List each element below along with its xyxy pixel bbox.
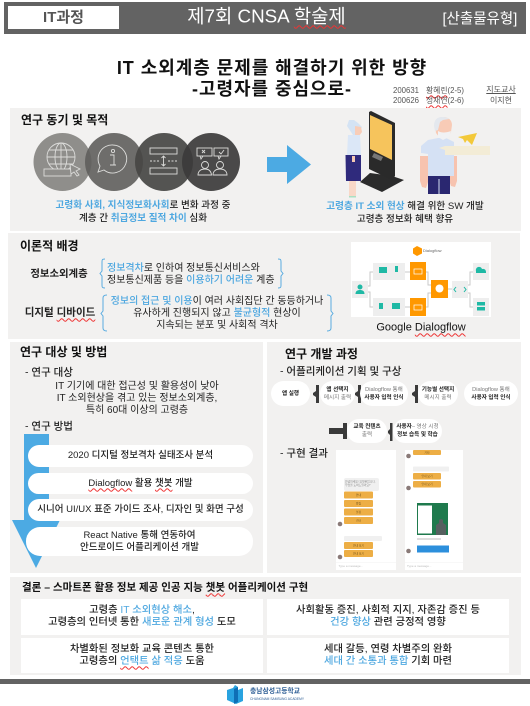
step 3: 시니어 UI/UX 표준 가이드 조사, 디자인 및 화면 구성 bbox=[37, 504, 244, 515]
target description: IT 기기에 대한 접근성 및 활용성이 낮아 bbox=[55, 381, 219, 392]
conclusion card 3: 고령층의 언택트 삶 적응 도움 bbox=[79, 656, 205, 666]
conclusion card 4 bbox=[267, 638, 509, 673]
advisor bbox=[486, 84, 516, 104]
flow step: education content: 출력 bbox=[362, 432, 372, 438]
heading: 연구 동기 및 목적 bbox=[21, 113, 108, 127]
flow step: app choices: 앱 선택지 bbox=[326, 386, 349, 392]
flow step: app choices: 메시지 출력 bbox=[324, 394, 351, 400]
definition: information-alienated class bbox=[107, 262, 275, 286]
header bar bbox=[4, 2, 526, 34]
icon row: four circles bbox=[34, 133, 240, 191]
chat screenshots: 기타 bbox=[424, 450, 430, 454]
braces bbox=[100, 258, 334, 332]
chat screenshots: 안내 보기 bbox=[421, 474, 433, 478]
chat screenshots: Type a message... bbox=[338, 564, 363, 568]
flow step: Dialogflow input again: Dialogflow 통해 bbox=[472, 386, 510, 392]
conclusion card 1: 고령층의 인터넷 통한 새로운 관계 형성 도모 bbox=[48, 617, 236, 628]
flow step: feature choices: 기능별 선택지 bbox=[422, 386, 454, 392]
school name: 충남삼성고등학교 bbox=[250, 688, 300, 695]
conclusion card 4: 세대 간 소통과 통합 기회 마련 bbox=[324, 656, 452, 666]
panel: research motivation and purpose bbox=[10, 108, 521, 231]
motivation text: 계층 간 취급정보 질적 차이 심화 bbox=[79, 212, 207, 224]
term: information-alienated class: 정보소외계층 bbox=[30, 269, 88, 280]
term: digital divide: 디지털 디바이드 bbox=[25, 307, 95, 319]
heading: 결론 – 스마트폰 활용 정보 제공 인공 지능 챗봇 어플리케이션 구현 bbox=[22, 582, 308, 594]
conclusion card 3: 차별화된 정보화 교육 콘텐츠 통한 bbox=[70, 644, 214, 654]
conclusion card 4: 세대 갈등, 연령 차별주의 완화 bbox=[324, 644, 452, 654]
event title: 제7회 CNSA 학술제 bbox=[187, 6, 346, 27]
subheading: result: - 구현 결과 bbox=[280, 448, 328, 460]
chat screenshots: 안내 보기 bbox=[353, 544, 364, 548]
chat screenshots bbox=[336, 450, 463, 570]
arrow: blue right bbox=[267, 145, 311, 184]
chat screenshots: 안녕하세요! 요챗봇입니다. bbox=[345, 480, 376, 484]
chat screenshots: 설정 bbox=[356, 510, 361, 514]
flow step: launch app: 앱 실행 bbox=[282, 390, 299, 396]
step 2 bbox=[28, 473, 253, 494]
panel: research target and method bbox=[10, 342, 263, 573]
flow connectors bbox=[313, 385, 418, 441]
flow step: Dialogflow input bbox=[360, 381, 408, 406]
chat screenshots: 안내 bbox=[356, 493, 361, 497]
chat screenshots: 안내 보기 bbox=[353, 552, 364, 556]
title: IT 소외계층 문제를 해결하기 위한 방향 bbox=[117, 58, 427, 78]
subheading: method: - 연구 방법 bbox=[25, 421, 73, 433]
illustration: elderly users and kiosk bbox=[346, 111, 490, 198]
conclusion card 2 bbox=[267, 599, 509, 635]
step 4: React Native 통해 연동하여 bbox=[83, 530, 196, 540]
subheading: planning: - 어플리케이션 기획 및 구상 bbox=[280, 366, 401, 378]
flow step: Dialogflow input again: 사용자 입력 인식 bbox=[471, 394, 511, 400]
subheading: target: - 연구 대상 bbox=[25, 367, 73, 379]
chat screenshots: 무엇을 도와드릴까요? bbox=[345, 483, 371, 487]
title bbox=[117, 58, 427, 99]
authors: 200626 bbox=[393, 96, 419, 104]
conclusion card 2: 사회활동 증진, 사회적 지지, 자존감 증진 등 bbox=[296, 605, 480, 616]
flow step: Dialogflow input: Dialogflow 통해 bbox=[365, 386, 403, 392]
flow step: education content: 교육 컨텐츠 bbox=[353, 424, 381, 430]
course label: IT과정 bbox=[43, 9, 84, 26]
flow step: user learning: 정보 습득 및 학습 bbox=[397, 432, 438, 438]
flow step: Dialogflow input again bbox=[464, 381, 518, 406]
conclusion card 1 bbox=[21, 599, 263, 635]
panel: conclusion bbox=[10, 577, 521, 675]
target description: IT 소외현상을 겪고 있는 정보소외계층, bbox=[57, 393, 217, 404]
motivation text bbox=[56, 200, 230, 224]
target description: 특히 60대 이상의 고령층 bbox=[86, 405, 188, 416]
definition: digital divide bbox=[111, 295, 323, 331]
diagram: Dialogflow architecture bbox=[351, 242, 491, 317]
flow step: app choices bbox=[320, 381, 355, 406]
motivation text: 고령화 사회, 지식정보화사회로 변화 과정 중 bbox=[56, 200, 230, 210]
chat screenshots: 알림 bbox=[356, 502, 361, 506]
flow step: user learning bbox=[393, 419, 442, 443]
solution text: 고령층 정보화 혜택 향유 bbox=[357, 214, 453, 224]
output type: [산출물유형] bbox=[442, 11, 517, 27]
conclusion card 1: 고령층 IT 소외현상 해소, bbox=[89, 605, 195, 616]
flow step: launch app bbox=[271, 381, 310, 406]
definition: information-alienated class: 정보통신제품 등을 이용하기 어려운 계층 bbox=[107, 275, 275, 286]
authors: 200631 bbox=[393, 86, 419, 94]
diagram: Dialogflow architecture: Dialogflow bbox=[423, 248, 442, 253]
heading: 이론적 배경 bbox=[20, 239, 79, 253]
solution text: 고령층 IT 소외 현상 해결 위한 SW 개발 bbox=[326, 200, 484, 212]
flow step: user learning: 사용자– 영상 시청 bbox=[396, 424, 439, 430]
panel: theoretical background bbox=[8, 233, 520, 339]
solution text bbox=[326, 200, 484, 224]
step 2: Dialogflow 활용 챗봇 개발 bbox=[88, 478, 193, 488]
authors bbox=[393, 86, 464, 108]
flow step: feature choices bbox=[418, 381, 458, 406]
arrow: process down bbox=[12, 434, 60, 568]
authors: 정재연(2-6) bbox=[426, 96, 464, 104]
advisor: 이지현 bbox=[490, 96, 512, 104]
step 4: 안드로이드 어플리케이션 개발 bbox=[80, 542, 199, 552]
conclusion card 3 bbox=[21, 638, 263, 673]
panel: development process bbox=[267, 342, 521, 573]
flow step: Dialogflow input: 사용자 입력 인식 bbox=[364, 394, 404, 400]
definition: digital divide: 지속되는 분포 및 사회적 격차 bbox=[156, 320, 278, 331]
heading: 연구 개발 과정 bbox=[285, 347, 358, 361]
authors: 황혜린(2-5) bbox=[426, 86, 464, 94]
step 4 bbox=[26, 527, 253, 556]
flow step: feature choices: 메시지 출력 bbox=[424, 394, 452, 400]
chat screenshots: Type a message... bbox=[407, 564, 432, 568]
school name english: CHUNGNAM SAMSUNG ACADEMY bbox=[250, 697, 304, 701]
heading: 연구 대상 및 방법 bbox=[20, 345, 107, 359]
step 3 bbox=[28, 499, 253, 521]
icon: school logo bbox=[227, 685, 243, 704]
definition: digital divide: 정보의 접근 및 이용이 여러 사회집단 간 동등하거나 bbox=[111, 296, 323, 307]
target description bbox=[55, 380, 219, 416]
step 1 bbox=[28, 445, 253, 467]
footer bar bbox=[0, 679, 530, 684]
advisor: 지도교사 bbox=[486, 84, 516, 94]
flow step: education content bbox=[347, 419, 387, 443]
title: -고령자를 중심으로- bbox=[192, 79, 352, 99]
conclusion card 2: 건강 향상 관련 긍정적 영향 bbox=[330, 617, 446, 628]
definition: information-alienated class: 정보격차로 인하여 정보통신서비스와 bbox=[107, 263, 260, 274]
chat screenshots: 기타 bbox=[356, 518, 361, 522]
course label bbox=[8, 6, 119, 29]
step 1: 2020 디지털 정보격차 실태조사 분석 bbox=[68, 450, 213, 461]
caption: Google Dialogflow: Google Dialogflow bbox=[376, 321, 466, 333]
chat screenshots: 안내 보기 bbox=[421, 482, 433, 486]
definition: digital divide: 유사하게 진행되지 않고 불균형적 현상이 bbox=[133, 308, 301, 319]
